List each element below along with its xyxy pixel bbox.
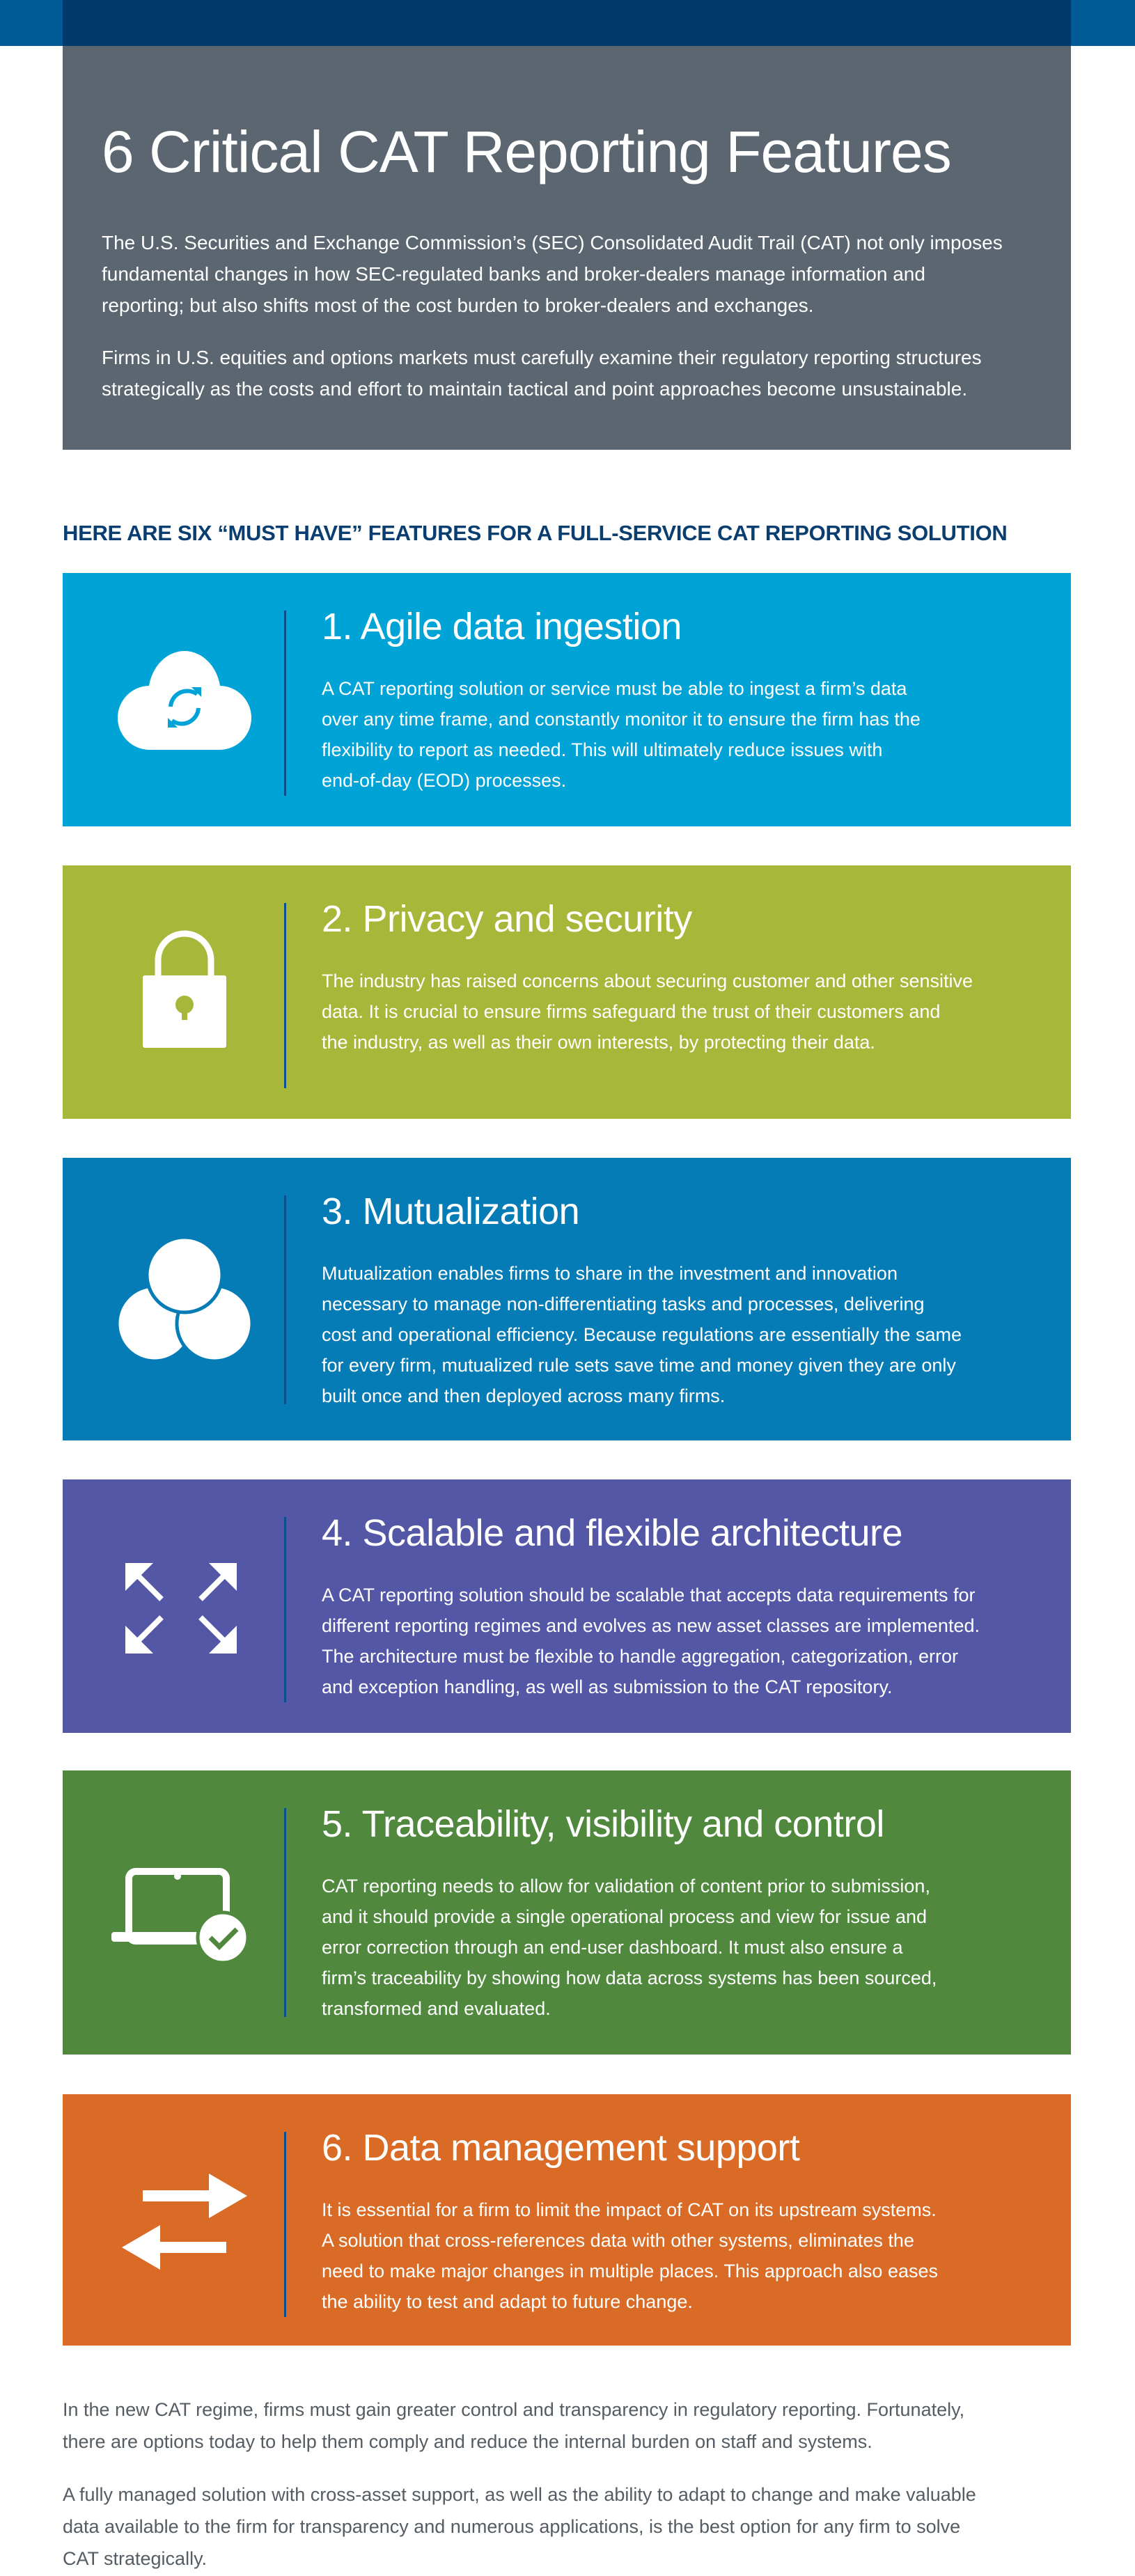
footer text: In the new CAT regime, firms must gain greater control and transparency in regulatory reporting. Fortunately, xyxy=(63,2399,964,2420)
intro text xyxy=(102,232,1003,400)
body: firm’s traceability by showing how data across systems has been sourced, xyxy=(322,1968,937,1988)
body: A solution that cross-references data with other systems, eliminates the xyxy=(322,2230,914,2251)
body: cost and operational efficiency. Because regulations are essentially the same xyxy=(322,1324,962,1345)
top bar xyxy=(0,0,1135,46)
body xyxy=(322,1876,937,2019)
footer text: data available to the firm for transparency and numerous applications, is the best option for any firm to solve xyxy=(63,2516,960,2537)
icon: exchange arrows xyxy=(122,2174,247,2270)
body xyxy=(322,1263,962,1406)
icon: overlapping circles xyxy=(118,1239,251,1359)
footer text: CAT strategically. xyxy=(63,2548,207,2569)
body: necessary to manage non-differentiating tasks and processes, delivering xyxy=(322,1294,925,1314)
body: A CAT reporting solution should be scalable that accepts data requirements for xyxy=(322,1585,976,1605)
body xyxy=(322,1585,980,1697)
body: and exception handling, as well as submission to the CAT repository. xyxy=(322,1676,892,1697)
title: 6 Critical CAT Reporting Features xyxy=(102,119,951,184)
body: flexibility to report as needed. This will ultimately reduce issues with xyxy=(322,739,882,760)
body: the ability to test and adapt to future change. xyxy=(322,2291,693,2312)
subheading: HERE ARE SIX “MUST HAVE” FEATURES FOR A FULL-SERVICE CAT REPORTING SOLUTION xyxy=(63,521,1007,545)
panel 4 xyxy=(63,1479,1071,1733)
body: built once and then deployed across many firms. xyxy=(322,1385,725,1406)
heading: 3. Mutualization xyxy=(322,1191,579,1232)
panel 3 xyxy=(63,1158,1071,1440)
body: The industry has raised concerns about securing customer and other sensitive xyxy=(322,971,973,991)
body: CAT reporting needs to allow for validation of content prior to submission, xyxy=(322,1876,930,1896)
body: Mutualization enables firms to share in the investment and innovation xyxy=(322,1263,898,1284)
body xyxy=(322,678,921,791)
body: data. It is crucial to ensure firms safeguard the trust of their customers and xyxy=(322,1001,940,1022)
body: end-of-day (EOD) processes. xyxy=(322,770,566,791)
heading: 2. Privacy and security xyxy=(322,898,692,940)
body: A CAT reporting solution or service must be able to ingest a firm’s data xyxy=(322,678,907,699)
body xyxy=(322,2199,938,2312)
intro text: fundamental changes in how SEC-regulated banks and broker-dealers manage information and xyxy=(102,263,925,285)
footer text xyxy=(63,2399,976,2569)
body: The architecture must be flexible to handle aggregation, categorization, error xyxy=(322,1646,958,1667)
body: the industry, as well as their own interests, by protecting their data. xyxy=(322,1032,875,1053)
body: and it should provide a single operational process and view for issue and xyxy=(322,1906,927,1927)
body: over any time frame, and constantly monitor it to ensure the firm has the xyxy=(322,709,921,730)
body: transformed and evaluated. xyxy=(322,1998,551,2019)
heading: 6. Data management support xyxy=(322,2127,799,2169)
body: need to make major changes in multiple places. This approach also eases xyxy=(322,2261,938,2282)
body xyxy=(322,971,973,1053)
heading: 1. Agile data ingestion xyxy=(322,606,682,647)
icon: padlock xyxy=(143,930,226,1048)
body: different reporting regimes and evolves as new asset classes are implemented. xyxy=(322,1615,980,1636)
body: error correction through an end-user dashboard. It must also ensure a xyxy=(322,1937,902,1958)
panel 2 xyxy=(63,865,1071,1119)
heading: 4. Scalable and flexible architecture xyxy=(322,1512,902,1554)
icon: expand arrows xyxy=(125,1563,237,1654)
panel 6 xyxy=(63,2094,1071,2346)
icon: laptop with check xyxy=(111,1868,246,1961)
body: for every firm, mutualized rule sets save time and money given they are only xyxy=(322,1355,956,1376)
icon: cloud sync xyxy=(118,651,251,750)
panel 1 xyxy=(63,573,1071,826)
intro text: The U.S. Securities and Exchange Commission’s (SEC) Consolidated Audit Trail (CAT) not only imposes xyxy=(102,232,1003,253)
body: It is essential for a firm to limit the impact of CAT on its upstream systems. xyxy=(322,2199,937,2220)
panel 5 xyxy=(63,1770,1071,2055)
heading: 5. Traceability, visibility and control xyxy=(322,1803,884,1845)
header panel xyxy=(63,46,1071,450)
intro text: reporting; but also shifts most of the cost burden to broker-dealers and exchanges. Firms in U.S. equities and options markets must carefully examine their regulatory reporting structures xyxy=(102,294,982,368)
intro text: strategically as the costs and effort to maintain tactical and point approaches become unsustainable. xyxy=(102,378,967,400)
footer text: there are options today to help them comply and reduce the internal burden on staff and systems. A fully managed solution with cross-asset support, as well as the ability to adapt to change and make valuable xyxy=(63,2431,976,2505)
